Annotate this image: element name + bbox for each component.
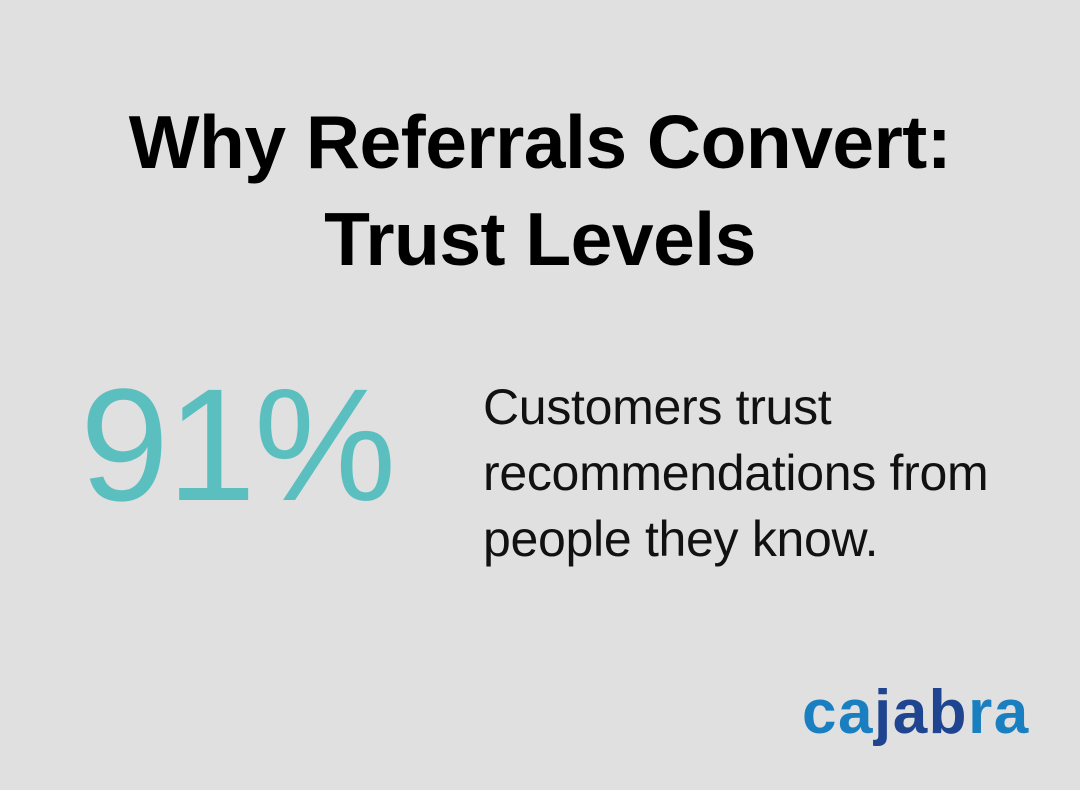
logo: cajabra: cajabra (802, 678, 1030, 747)
text block: description: recommendations from (483, 445, 988, 501)
title (128, 100, 951, 281)
stat: 91%: 91% (80, 355, 394, 534)
text block: description: Customers trust (483, 379, 831, 435)
title: Why Referrals Convert: (129, 100, 951, 184)
title: Trust Levels (324, 197, 756, 281)
text block: description: people they know. (483, 511, 878, 567)
text block: description (483, 379, 988, 567)
